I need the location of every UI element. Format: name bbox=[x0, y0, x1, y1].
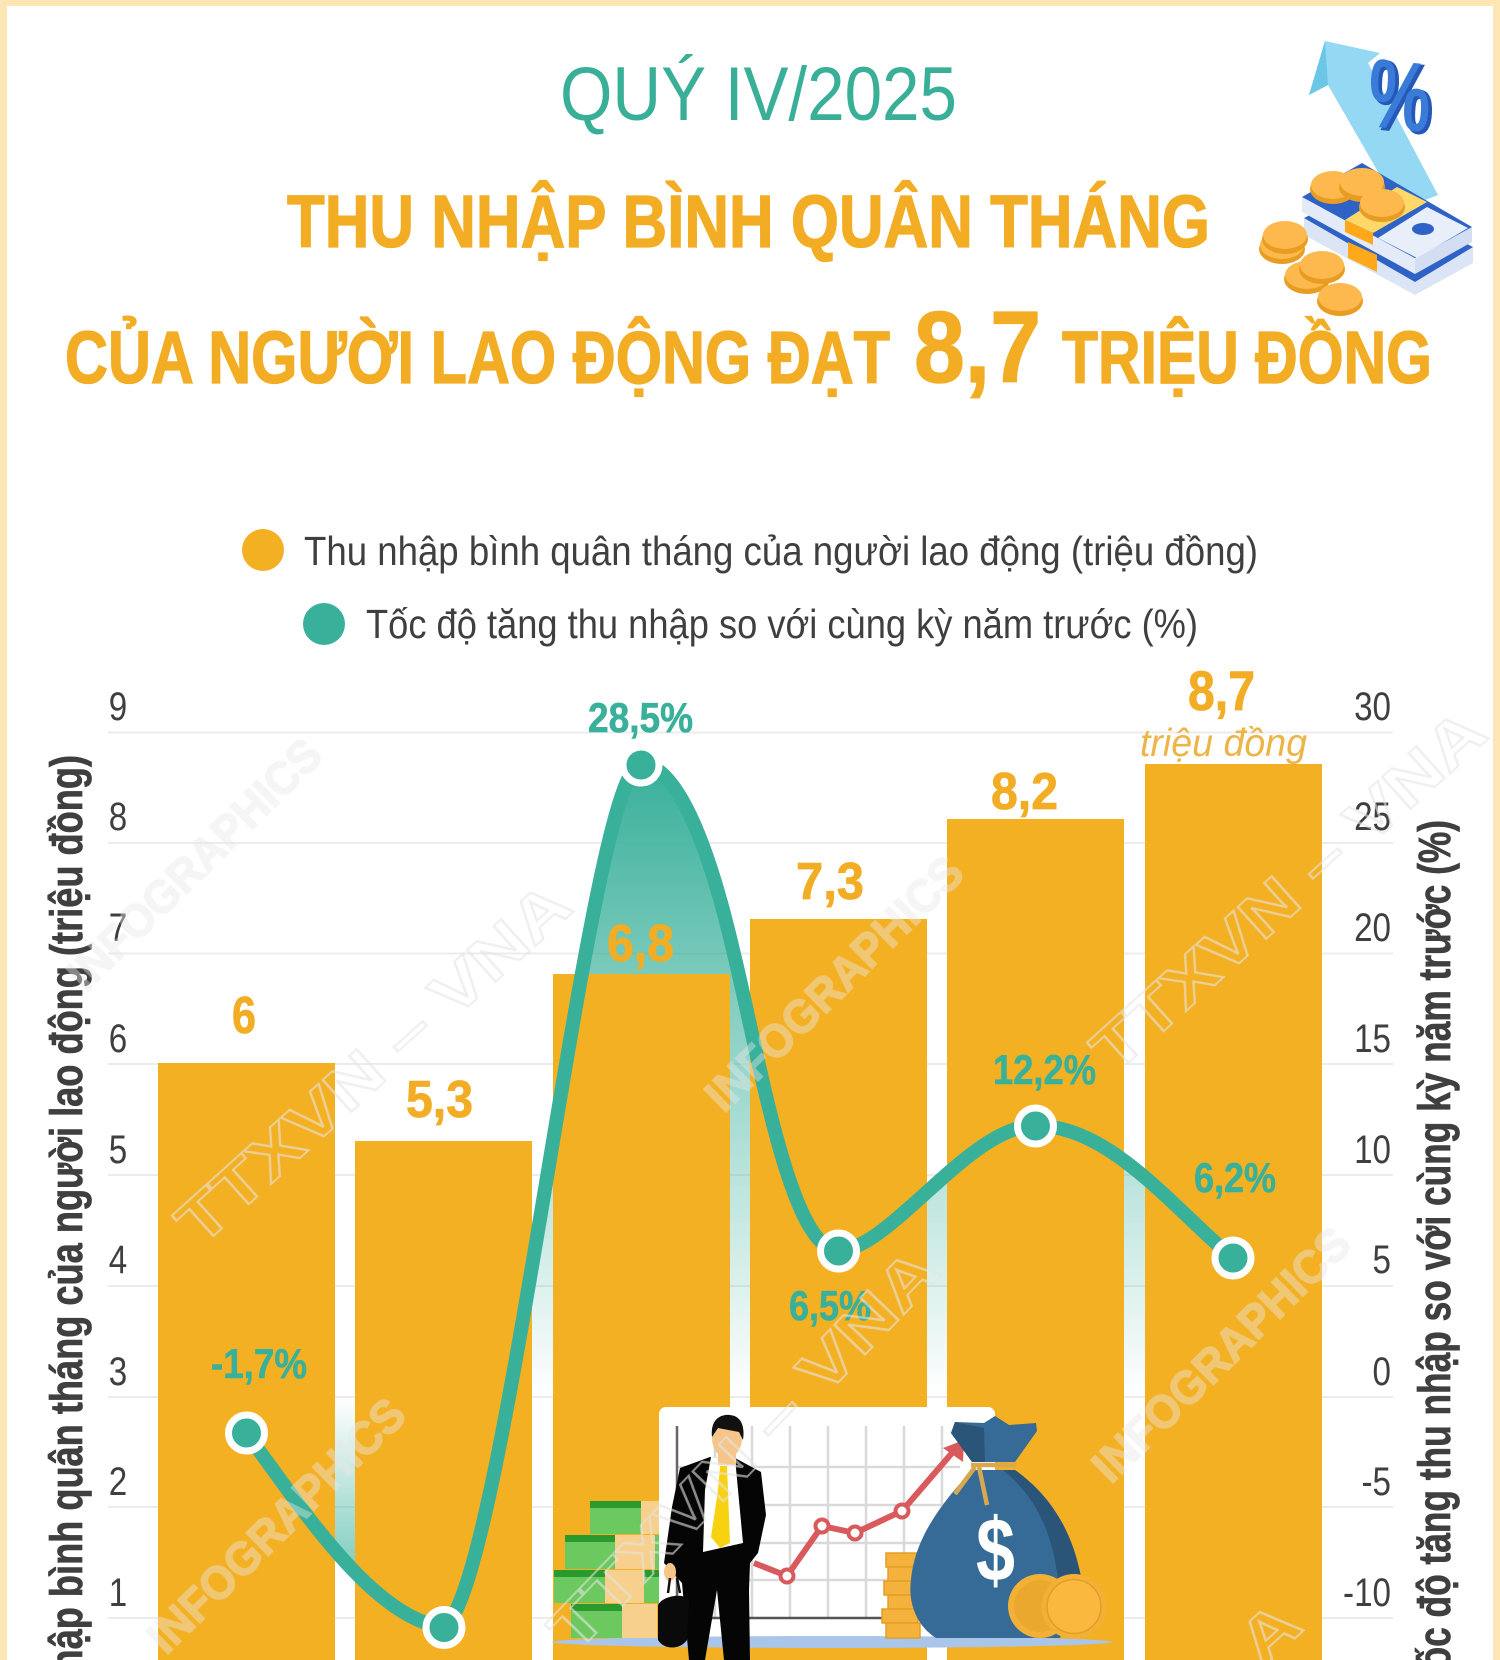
watermarks: TTXVN – VNA bbox=[1078, 696, 1500, 1085]
right axis title: Tốc độ tăng thu nhập so với cùng kỳ năm trước (%) bbox=[1409, 820, 1460, 1660]
left axis labels: 9 bbox=[109, 684, 127, 729]
bar value labels: 8,2 bbox=[991, 763, 1058, 821]
growth rate line bbox=[246, 764, 1233, 1627]
watermarks: INFOGRAPHICS bbox=[695, 846, 974, 1121]
watermarks: INFOGRAPHICS bbox=[1082, 1217, 1361, 1492]
right axis labels: -5 bbox=[1361, 1459, 1391, 1504]
left axis labels: 6 bbox=[109, 1016, 127, 1061]
growth rate labels: 12,2% bbox=[993, 1046, 1096, 1093]
left axis labels: 8 bbox=[109, 794, 127, 839]
legend bbox=[242, 528, 1258, 647]
watermarks: INFOGRAPHICS bbox=[57, 728, 332, 1000]
right axis labels: 30 bbox=[1354, 684, 1391, 729]
right axis labels: 5 bbox=[1373, 1237, 1391, 1282]
legend: Tốc độ tăng thu nhập so với cùng kỳ năm trước (%) bbox=[366, 601, 1198, 647]
left axis labels: 2 bbox=[109, 1459, 127, 1504]
left axis labels: 4 bbox=[109, 1237, 127, 1282]
right axis labels: 0 bbox=[1373, 1349, 1391, 1394]
chart: area under growth line bbox=[246, 764, 1233, 1627]
bar value labels: 7,3 bbox=[796, 853, 864, 911]
right axis labels: 20 bbox=[1354, 905, 1391, 950]
right axis labels bbox=[1343, 684, 1391, 1615]
watermarks: TTXVN – VNA bbox=[535, 1236, 953, 1660]
growth rate labels bbox=[211, 694, 1276, 1387]
chart: income bars bbox=[158, 764, 1322, 1660]
unit label: triệu đồng bbox=[1140, 722, 1307, 765]
watermarks: TTXVN – VNA bbox=[163, 869, 585, 1258]
growth rate labels: -1,7% bbox=[211, 1340, 307, 1387]
illustration: businessman, chart board, cash and money bag: $ bbox=[976, 1501, 1015, 1601]
icon: money stacks, coins, rising arrow and percent: % bbox=[1369, 41, 1436, 156]
bar value labels: 5,3 bbox=[406, 1071, 473, 1129]
right axis labels: 10 bbox=[1354, 1127, 1391, 1172]
title: main heading: 8,7 bbox=[914, 292, 1041, 404]
bar value labels: 6,8 bbox=[607, 915, 674, 973]
icon: money stacks, coins, rising arrow and percent bbox=[1259, 39, 1473, 316]
illustration: businessman, chart board, cash and money bag bbox=[552, 1407, 1112, 1660]
left axis labels: 1 bbox=[109, 1570, 127, 1615]
left axis labels bbox=[109, 684, 127, 1615]
right axis labels: 15 bbox=[1354, 1016, 1391, 1061]
title: quarter: QUÝ IV/2025 bbox=[560, 52, 957, 137]
icon: money stacks, coins, rising arrow and percent: % bbox=[1366, 39, 1433, 154]
title: main heading bbox=[65, 180, 1432, 404]
right axis labels: -10 bbox=[1343, 1570, 1391, 1615]
bar value labels: 6 bbox=[232, 987, 256, 1045]
watermarks: INFOGRAPHICS bbox=[137, 1388, 416, 1660]
chart: grid lines bbox=[108, 732, 1393, 1618]
growth rate markers bbox=[228, 747, 1251, 1646]
growth rate labels: 6,2% bbox=[1194, 1154, 1276, 1201]
title: main heading: CỦA NGƯỜI LAO ĐỘNG ĐẠT bbox=[65, 316, 890, 399]
title: main heading: THU NHẬP BÌNH QUÂN THÁNG bbox=[287, 180, 1210, 263]
bar value labels bbox=[232, 659, 1255, 1129]
left axis labels: 3 bbox=[109, 1349, 127, 1394]
bar value labels: 8,7 bbox=[1188, 659, 1255, 722]
legend: Thu nhập bình quân tháng của người lao động (triệu đồng) bbox=[304, 528, 1258, 574]
watermarks bbox=[57, 696, 1500, 1660]
left axis labels: 5 bbox=[109, 1127, 127, 1172]
right axis labels: 25 bbox=[1354, 794, 1391, 839]
left axis labels: 7 bbox=[109, 905, 127, 950]
growth rate labels: 6,5% bbox=[789, 1282, 871, 1329]
growth rate labels: 28,5% bbox=[588, 694, 693, 741]
